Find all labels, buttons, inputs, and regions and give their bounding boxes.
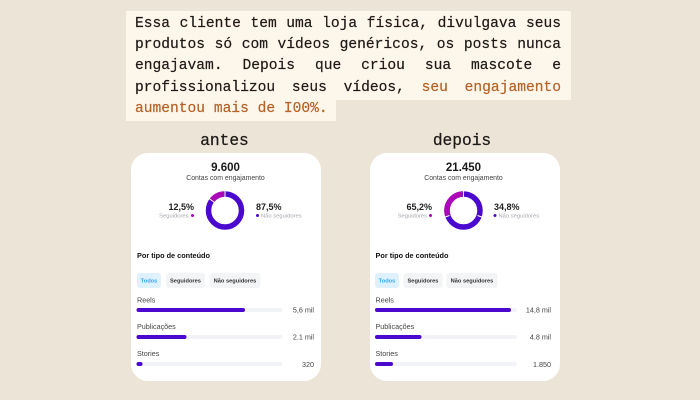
bar: Reels: Reels bbox=[137, 296, 156, 304]
metric: 9.600 accounts: Contas com engajamento bbox=[186, 175, 265, 182]
filter chips: Não seguidores bbox=[451, 278, 493, 284]
story line 1: Essa cliente tem uma loja física, divulgava seus bbox=[135, 16, 561, 32]
story line 3: engajavam. Depois que criou sua mascote e bbox=[135, 58, 561, 74]
legend: non-followers 34,8%: Não seguidores bbox=[498, 214, 539, 220]
panel: antes bbox=[131, 153, 321, 381]
bar: Reels: 5,6 mil bbox=[293, 306, 314, 314]
panel: depois bbox=[370, 153, 560, 381]
bar: Publicações bbox=[136, 322, 314, 342]
metric: 9.600 accounts: 9.600 bbox=[211, 162, 240, 174]
bar: Stories: 1.850 bbox=[533, 360, 551, 369]
bar: Reels: Reels bbox=[376, 296, 394, 304]
heading: depois: depois bbox=[433, 132, 491, 150]
section heading: Por tipo de conteúdo bbox=[376, 251, 449, 260]
legend: followers 65,2%: Seguidores bbox=[398, 214, 427, 220]
story line 5 highlighted: aumentou mais de I00%. bbox=[135, 101, 328, 117]
donut chart: followers split bbox=[442, 190, 484, 227]
bar: Publicações: 4.8 mil bbox=[530, 332, 551, 342]
bar: Publicações bbox=[375, 322, 551, 342]
bar: Stories: Stories bbox=[376, 349, 398, 358]
legend: followers 65,2%: 65,2% bbox=[406, 202, 432, 212]
filter chips bbox=[375, 273, 498, 288]
filter chips bbox=[137, 273, 260, 288]
legend: non-followers 34,8%: 34,8% bbox=[494, 202, 520, 212]
donut chart: followers split bbox=[208, 190, 242, 227]
metric: 9.600 accounts bbox=[186, 162, 265, 182]
section heading: Por tipo de conteúdo bbox=[137, 251, 211, 260]
filter chips: Todos bbox=[379, 278, 395, 284]
legend: followers 65,2% bbox=[398, 202, 432, 220]
bar: Stories bbox=[375, 349, 551, 369]
story line 2: produtos só com vídeos genéricos, os posts nunca bbox=[135, 37, 561, 53]
bar: Publicações: Publicações bbox=[137, 322, 176, 331]
legend: non-followers 34,8% bbox=[494, 202, 539, 220]
legend: non-followers 87,5%: 87,5% bbox=[256, 202, 282, 212]
legend: followers 12,5% bbox=[159, 202, 194, 220]
bar: Stories: 320 bbox=[302, 360, 314, 369]
metric: 21.450 accounts: 21.450 bbox=[446, 162, 481, 174]
bar: Stories bbox=[136, 349, 314, 369]
filter chips: Não seguidores bbox=[214, 278, 256, 284]
bar: Reels bbox=[136, 296, 314, 314]
metric: 21.450 accounts bbox=[424, 162, 503, 182]
bar: Reels: 14,8 mil bbox=[526, 306, 551, 314]
legend: followers 12,5%: Seguidores bbox=[159, 214, 189, 220]
text block: client story bbox=[126, 11, 571, 121]
bar: Publicações: 2.1 mil bbox=[293, 332, 314, 342]
filter chips: Todos bbox=[141, 278, 157, 284]
bar: Stories: Stories bbox=[137, 349, 160, 358]
legend: non-followers 87,5% bbox=[256, 202, 302, 220]
filter chips: Seguidores bbox=[408, 278, 438, 284]
heading: antes: antes bbox=[200, 132, 249, 150]
bar: Publicações: Publicações bbox=[376, 322, 415, 331]
story line 4: profissionalizou seus vídeos, seu engajamento bbox=[135, 80, 561, 96]
filter chips: Seguidores bbox=[170, 278, 201, 284]
legend: non-followers 87,5%: Não seguidores bbox=[261, 214, 302, 220]
metric: 21.450 accounts: Contas com engajamento bbox=[424, 175, 503, 182]
bar: Reels bbox=[375, 296, 551, 314]
legend: followers 12,5%: 12,5% bbox=[168, 202, 194, 212]
